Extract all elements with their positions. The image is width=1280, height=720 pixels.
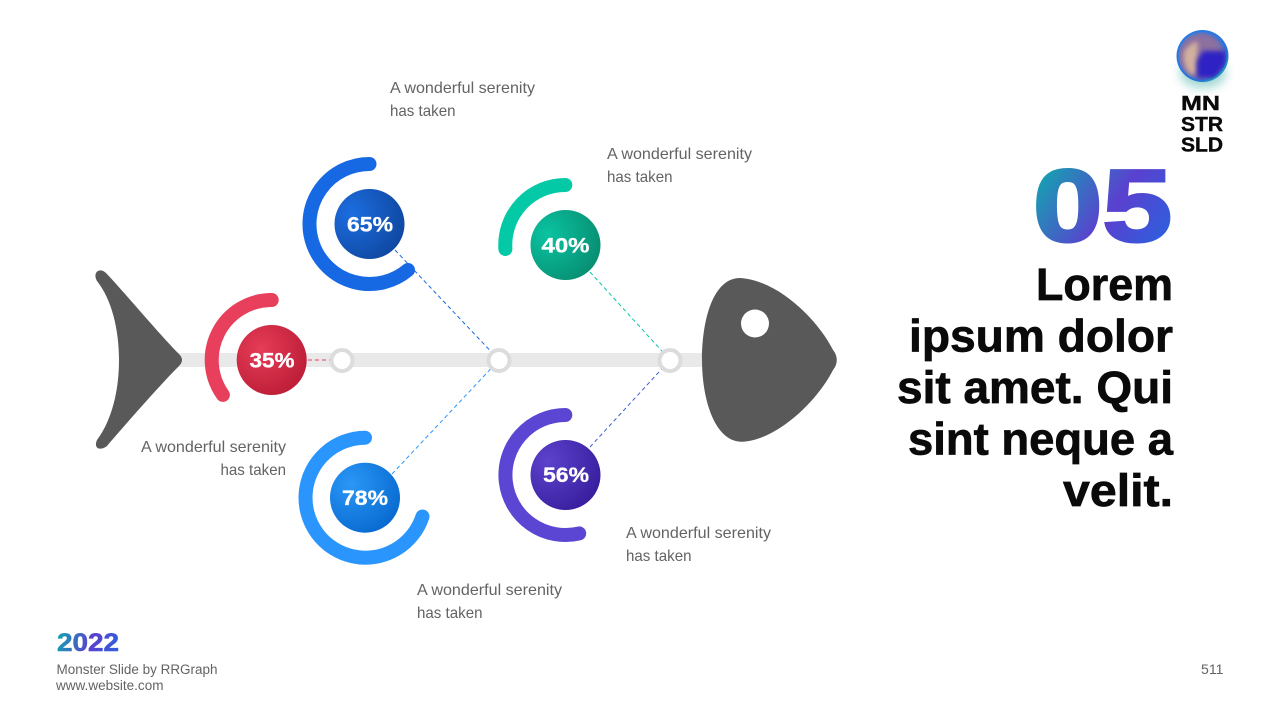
heading — [897, 259, 1174, 516]
label: 35% — [141, 439, 286, 479]
heading: sit amet. Qui — [897, 362, 1173, 413]
label: 35%: A wonderful serenity — [141, 439, 286, 456]
label: 65% — [390, 80, 535, 120]
logo text: STR — [1181, 114, 1224, 136]
icon: fish tail — [95, 270, 182, 449]
icon: fish head — [702, 278, 837, 442]
label: 40%: has taken — [607, 169, 672, 186]
spine nodes — [332, 350, 680, 371]
logo text — [1181, 93, 1224, 156]
heading: sint neque a — [908, 414, 1174, 464]
gauge: 35%: 35% — [250, 350, 295, 372]
logo text: SLD — [1181, 134, 1223, 156]
footer credits: www.website.com — [55, 678, 164, 693]
page number: 511 — [1201, 662, 1224, 677]
logo text: MN — [1181, 93, 1220, 115]
gauge: 65% — [309, 164, 408, 284]
dashed connectors — [308, 250, 670, 474]
footer credits: Monster Slide by RRGraph — [56, 662, 218, 677]
label: 56%: has taken — [626, 548, 692, 565]
heading: ipsum dolor — [909, 310, 1173, 362]
section number: 05 — [1033, 149, 1172, 263]
gauge: 56%: 56% — [543, 464, 589, 487]
gauge: 78% — [306, 438, 422, 558]
label: 56% — [626, 525, 771, 565]
heading: Lorem — [1036, 259, 1173, 310]
gauge: 40% — [505, 185, 600, 280]
label: 78% — [417, 582, 562, 622]
footer credits — [55, 662, 218, 693]
gauge: 40%: 40% — [542, 234, 590, 258]
label: 78%: A wonderful serenity — [417, 582, 562, 599]
heading: velit. — [1063, 465, 1173, 516]
gauge: 78%: 78% — [342, 487, 388, 510]
label: 78%: has taken — [417, 605, 482, 622]
icon: logo sphere — [1176, 30, 1228, 88]
gauge: 65%: 65% — [347, 214, 393, 236]
label: 65%: A wonderful serenity — [390, 80, 535, 97]
gauge: 56% — [505, 415, 600, 535]
label: 40% — [607, 146, 752, 186]
spine — [175, 353, 710, 367]
label: 35%: has taken — [220, 462, 286, 479]
label: 65%: has taken — [390, 103, 456, 120]
footer year: 2022 — [57, 629, 119, 657]
gauge: 35% — [212, 300, 307, 395]
label: 56%: A wonderful serenity — [626, 525, 771, 542]
label: 40%: A wonderful serenity — [607, 146, 752, 163]
